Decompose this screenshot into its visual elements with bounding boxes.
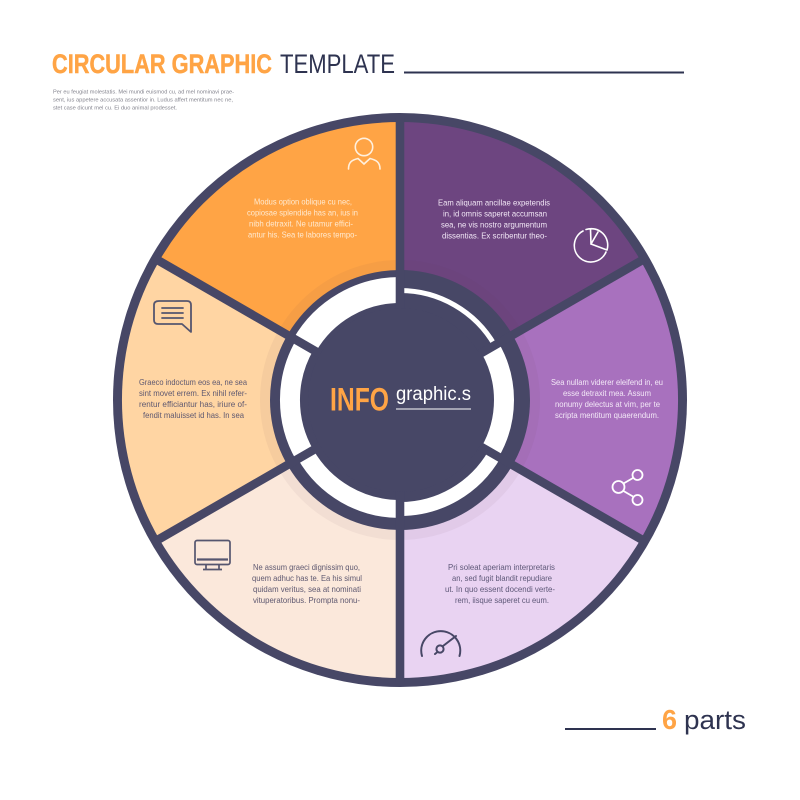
segment: purple bbox=[400, 261, 678, 539]
text block: purple segment: nonumy delectus at vim, per te bbox=[555, 399, 660, 409]
segment: orange bbox=[159, 122, 400, 400]
text block: dark purple segment: sea, ne vis nostro argumentum bbox=[441, 220, 547, 230]
outer ring bbox=[113, 113, 687, 687]
segment: light purple bbox=[400, 400, 641, 678]
inner disc bbox=[308, 308, 492, 492]
intro text: sent, ius appetere accusata assentior in. Ludus affert mentitum nec ne, bbox=[53, 98, 234, 104]
intro text: stet case dicunt mel cu. Ei duo animal prodesset. bbox=[53, 106, 177, 112]
text block: pale peach segment bbox=[252, 562, 362, 605]
circular chart bbox=[113, 113, 687, 687]
separators bbox=[156, 118, 644, 682]
text block: purple segment bbox=[551, 377, 663, 420]
icon: monitor bbox=[195, 540, 230, 570]
text block: orange segment: copiosae splendide has an, ius in bbox=[247, 208, 358, 218]
center logo bbox=[330, 382, 471, 418]
text block: pale peach segment: quidam veritus, sea at nominati bbox=[253, 584, 361, 594]
text block: orange segment: Modus option oblique cu nec, bbox=[254, 196, 352, 206]
text block: dark purple segment: dissentias. Ex scribentur theo- bbox=[442, 230, 547, 240]
text block: dark purple segment: in, id omnis saperet accumsan bbox=[443, 208, 547, 218]
footer label bbox=[565, 704, 746, 735]
intro text: Per eu feugiat molestatis. Mei mundi euismod cu, ad mel nominavi prae- bbox=[53, 90, 234, 96]
text block: orange segment: nibh detraxit. Ne utamur effici- bbox=[249, 218, 353, 228]
text block: dark purple segment: Eam aliquam ancillae expetendis bbox=[438, 198, 550, 208]
footer label: parts bbox=[684, 705, 746, 735]
icon: person bbox=[348, 138, 380, 169]
white ring arcs bbox=[290, 290, 504, 509]
footer label: 6 bbox=[662, 704, 677, 735]
text block: purple segment: esse detraxit mea. Assum bbox=[563, 388, 651, 398]
text block: light purple segment bbox=[445, 562, 555, 605]
text block: purple segment: Sea nullam viderer eleifend in, eu bbox=[551, 377, 663, 387]
segment: pale peach bbox=[159, 400, 400, 678]
text block: pale peach segment: Ne assum graeci dignissim quo, bbox=[253, 562, 360, 572]
text block: light purple segment: rem, iisque saperet cu eum. bbox=[455, 595, 549, 605]
text block: light purple segment: Pri soleat aperiam interpretaris bbox=[448, 562, 555, 572]
center logo: graphic.s bbox=[396, 384, 471, 405]
text block: pale orange segment: sint movet errem. Ex nihil refer- bbox=[139, 388, 247, 398]
text block: dark purple segment bbox=[438, 198, 550, 240]
text block: pale orange segment: Graeco indoctum eos ea, ne sea bbox=[139, 377, 247, 387]
intro text bbox=[53, 90, 234, 112]
segment: pale orange bbox=[122, 261, 400, 539]
title: TEMPLATE bbox=[280, 49, 395, 79]
text block: pale orange segment: rentur efficiantur has, iriure of- bbox=[139, 399, 247, 409]
text block: light purple segment: an, sed fugit blandit repudiare bbox=[452, 573, 552, 583]
center logo: INFO bbox=[330, 382, 389, 418]
inner halo bbox=[260, 260, 540, 540]
text block: pale orange segment: fendit maluisset id has. In sea bbox=[143, 410, 244, 420]
title: CIRCULAR GRAPHIC bbox=[52, 49, 272, 79]
text block: purple segment: scripta mentitum quaerendum. bbox=[555, 410, 659, 420]
title bbox=[52, 49, 684, 79]
text block: orange segment: antur his. Sea te labores tempo- bbox=[248, 230, 357, 240]
icon: speech bubble bbox=[154, 301, 191, 332]
icon: pie chart bbox=[574, 229, 608, 262]
icon: share bbox=[612, 470, 642, 505]
text block: pale peach segment: quem adhuc has te. Ea his simul bbox=[252, 573, 362, 583]
segment: dark purple bbox=[400, 122, 641, 400]
icon: gauge bbox=[421, 631, 460, 656]
text block: pale peach segment: vituperatoribus. Prompta nonu- bbox=[253, 595, 360, 605]
central disc bbox=[270, 270, 530, 530]
text block: orange segment bbox=[247, 196, 358, 240]
text block: pale orange segment bbox=[139, 377, 247, 420]
text block: light purple segment: ut. In quo essent docendi verte- bbox=[445, 584, 555, 594]
